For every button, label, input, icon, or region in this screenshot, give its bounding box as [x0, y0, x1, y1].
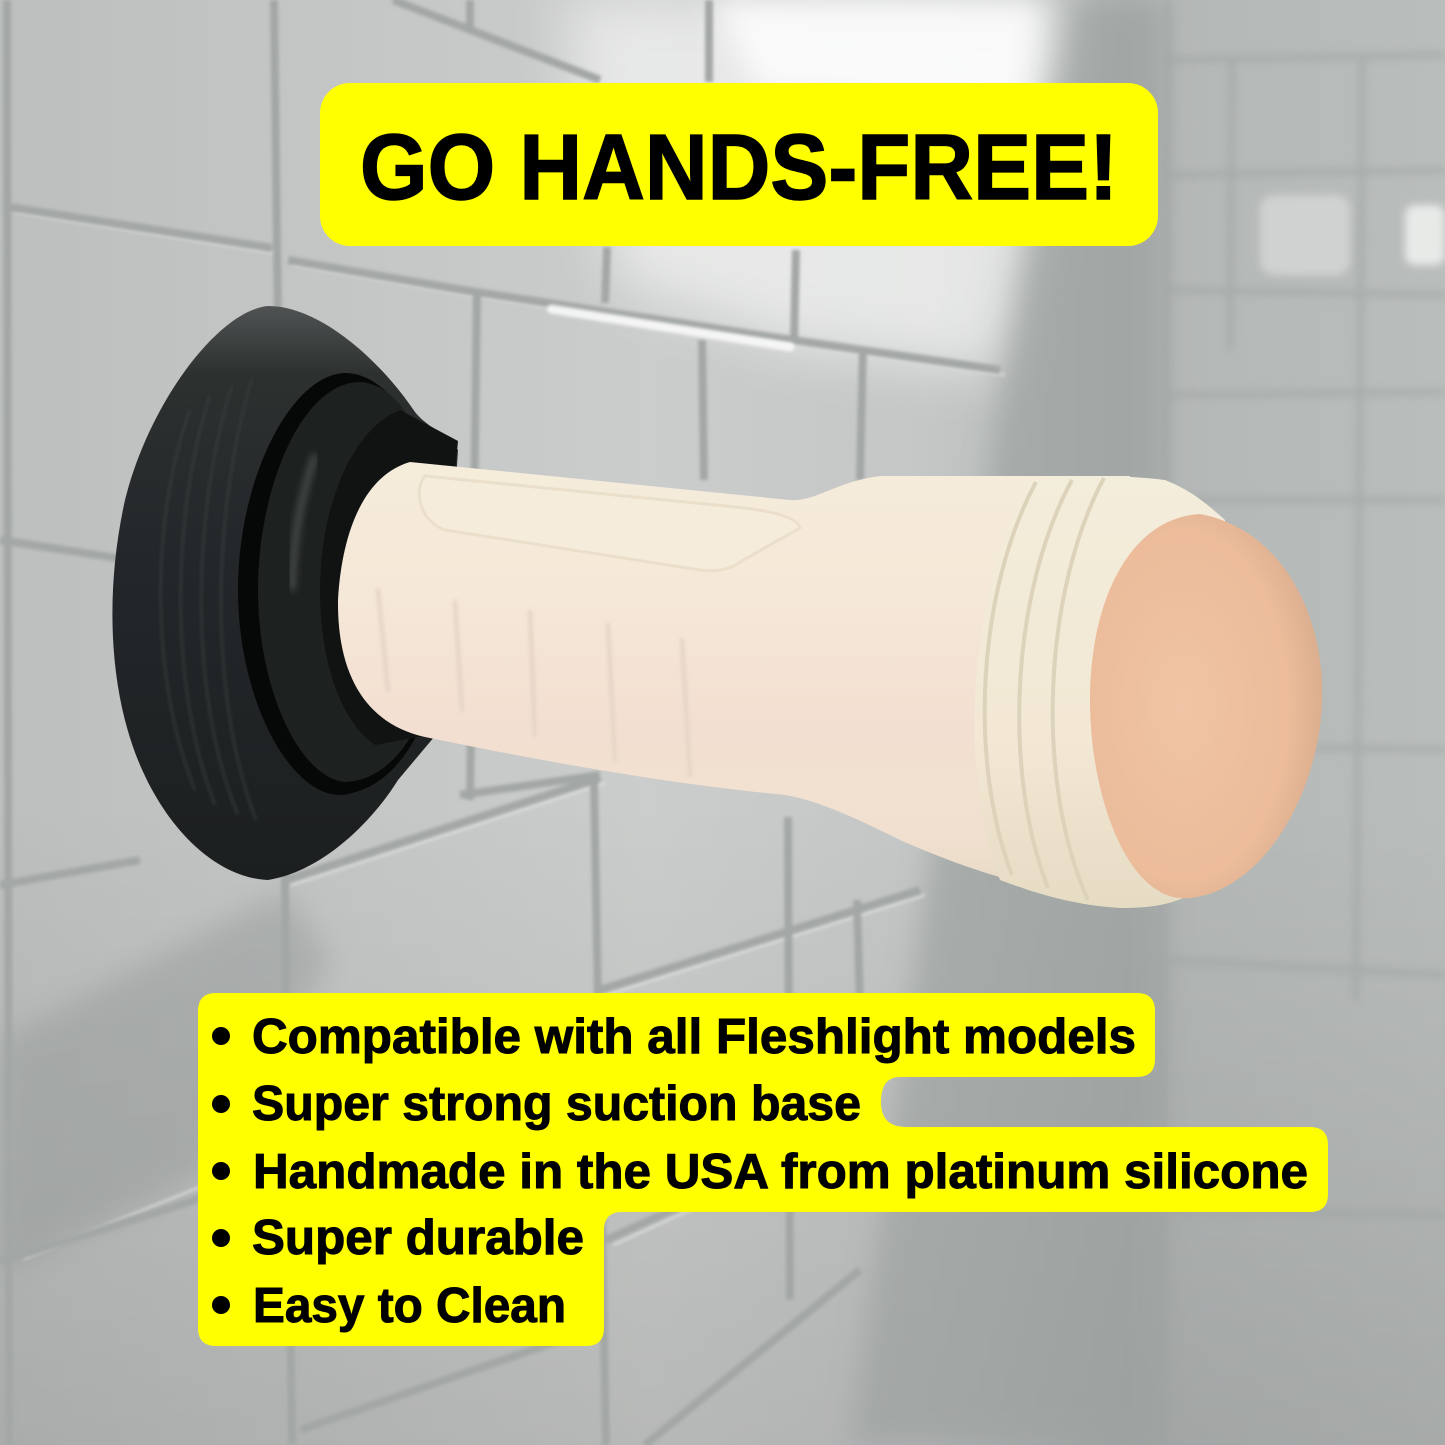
base disc [112, 306, 458, 880]
end cap [1090, 514, 1322, 898]
bullet: suction: Super strong suction base [252, 1077, 861, 1131]
ring threads [985, 478, 1104, 900]
wall light patch [560, 0, 1070, 375]
sleeve body [338, 462, 1130, 900]
threaded ring [975, 476, 1225, 908]
bullet: durable: Super durable [252, 1211, 584, 1265]
product sleeve [338, 462, 1322, 908]
wall shadow lower left [0, 890, 330, 1275]
headline text: GO HANDS-FREE! [360, 115, 1118, 219]
right wall tile grout [1160, 0, 1445, 1445]
wet highlights [547, 304, 795, 352]
collar highlight [292, 455, 315, 590]
base ridges [161, 378, 256, 820]
bullet: material: Handmade in the USA from platinum silicone [253, 1145, 1308, 1199]
base collar [258, 382, 445, 782]
left wall tile grout [15, 212, 1005, 1259]
sleeve grip plate [419, 476, 800, 571]
sleeve grip ribs [378, 590, 690, 775]
front ring [320, 410, 458, 745]
suction base [112, 306, 458, 880]
base groove [238, 373, 450, 795]
bullet: compatibility: Compatible with all Fleshlight models [252, 1010, 1136, 1064]
bullet: cleaning: Easy to Clean [253, 1279, 566, 1333]
corner shadow [850, 0, 1165, 1445]
stepped yellow highlight [198, 993, 1328, 1346]
